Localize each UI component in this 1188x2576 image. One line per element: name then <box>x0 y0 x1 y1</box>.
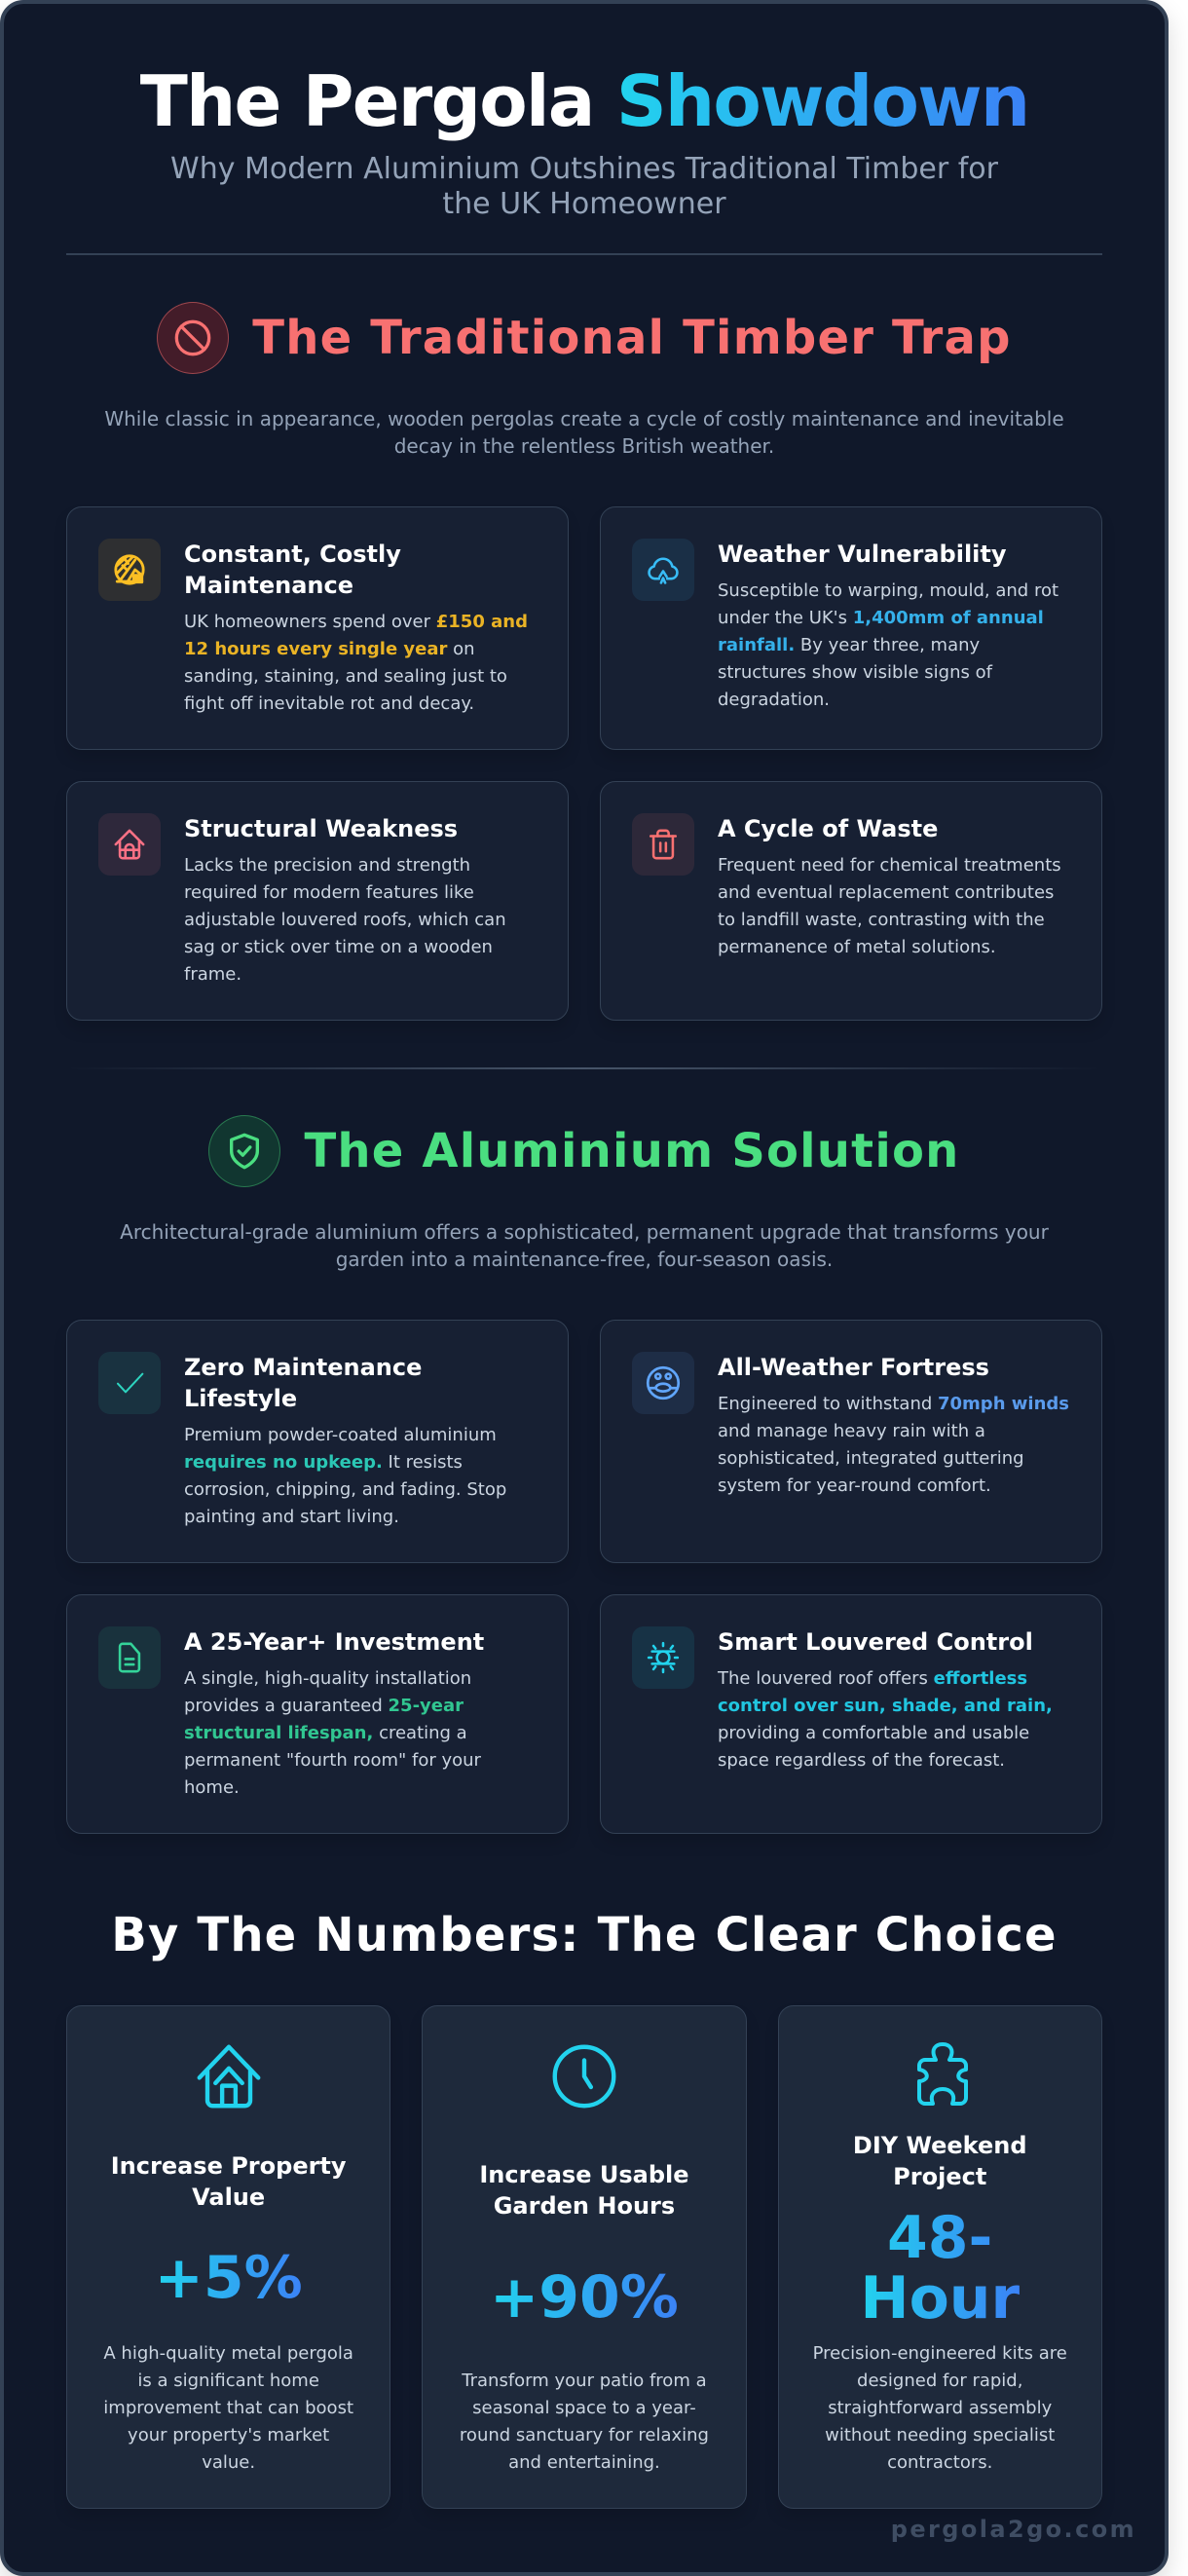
icon: weather face <box>632 1352 694 1414</box>
card: costly maintenance <box>66 506 569 750</box>
card text: Zero Maintenance Lifestyle <box>184 1354 422 1412</box>
stat number: Hour <box>860 2264 1020 2333</box>
card text: Engineered to withstand 70mph winds and manage heavy rain with a sophisticated, integrated guttering system for year-round comfort. <box>718 1394 1069 1496</box>
stat number: 48- <box>887 2204 992 2272</box>
stat text: Precision-engineered kits are designed for rapid, straightforward assembly without needing specialist contractors. <box>813 2343 1067 2473</box>
icon: ban <box>157 302 229 374</box>
card text: A single, high-quality installation provides a guaranteed 25-year structural lifespan, creating a permanent "fourth room" for your home. <box>184 1668 481 1798</box>
icon: document <box>98 1626 161 1689</box>
icon: house <box>197 2045 261 2108</box>
stat card: property value <box>66 2005 390 2509</box>
watermark: pergola2go.com <box>891 2516 1136 2543</box>
card text: Susceptible to warping, mould, and rot under the UK's 1,400mm of annual rainfall. By year three, many structures show visible signs of degradation. <box>718 580 1058 710</box>
card text: Smart Louvered Control <box>718 1628 1033 1656</box>
stat title: Increase Property Value <box>111 2152 347 2211</box>
card: smart louvered control <box>600 1594 1102 1834</box>
icon: clock <box>553 2045 615 2108</box>
card text: All-Weather Fortress <box>718 1354 989 1381</box>
card: structural weakness <box>66 781 569 1021</box>
card text: The louvered roof offers effortless control over sun, shade, and rain, providing a comfortable and usable space regardless of the forecast. <box>718 1668 1053 1771</box>
intro: timber: While classic in appearance, wooden pergolas create a cycle of costly maintenance and inevitable decay in the relentless British weather. <box>104 407 1064 458</box>
icon: house <box>98 813 161 876</box>
icon: maintenance <box>98 539 161 601</box>
card: zero maintenance <box>66 1320 569 1563</box>
card text: Lacks the precision and strength required for modern features like adjustable louvered roofs, which can sag or stick over time on a wooden frame. <box>184 855 506 985</box>
stat title: Increase Usable Garden Hours <box>479 2161 689 2220</box>
card text: Constant, Costly Maintenance <box>184 541 401 599</box>
icon: check <box>98 1352 161 1414</box>
card text: Premium powder-coated aluminium requires no upkeep. It resists corrosion, chipping, and fading. Stop painting and start living. <box>184 1425 506 1527</box>
stat text: A high-quality metal pergola is a significant home improvement that can boost your property's market value. <box>103 2343 353 2473</box>
icon: trash <box>632 813 694 876</box>
card: 25-year investment <box>66 1594 569 1834</box>
card: all-weather fortress <box>600 1320 1102 1563</box>
card text: A Cycle of Waste <box>718 815 938 842</box>
stat text: Transform your patio from a seasonal space to a year-round sanctuary for relaxing and entertaining. <box>460 2371 709 2473</box>
stat number: +5% <box>155 2244 303 2312</box>
heading text: The Aluminium Solution <box>304 1124 960 1178</box>
card text: Structural Weakness <box>184 815 458 842</box>
card text: Frequent need for chemical treatments and eventual replacement contributes to landfill waste, contrasting with the permanence of metal solutions. <box>718 855 1061 957</box>
heading text: The Traditional Timber Trap <box>252 311 1012 365</box>
title: The Pergola Showdown <box>140 60 1028 142</box>
icon: shield check <box>208 1115 280 1187</box>
heading: by the numbers: By The Numbers: The Clear Choice <box>111 1908 1058 1962</box>
icon: sun louvre <box>632 1626 694 1689</box>
subtitle: Why Modern Aluminium Outshines Traditional Timber for the UK Homeowner <box>170 152 998 221</box>
heading: aluminium solution <box>208 1115 960 1187</box>
stat number <box>860 2204 1020 2333</box>
card text: A 25-Year+ Investment <box>184 1628 484 1656</box>
intro: aluminium: Architectural-grade aluminium offers a sophisticated, permanent upgrade that transforms your garden into a maintenance-free, four-season oasis. <box>120 1220 1049 1271</box>
stat title: DIY Weekend Project <box>853 2132 1027 2190</box>
icon: cloud <box>632 539 694 601</box>
card: weather vulnerability <box>600 506 1102 750</box>
stat number: +90% <box>490 2263 679 2332</box>
stat card: diy project <box>778 2005 1102 2509</box>
icon: puzzle <box>917 2042 968 2106</box>
card text: UK homeowners spend over £150 and 12 hours every single year on sanding, staining, and sealing just to fight off inevitable rot and decay. <box>184 612 528 714</box>
card: cycle of waste <box>600 781 1102 1021</box>
stat card: garden hours <box>422 2005 747 2509</box>
card text: Weather Vulnerability <box>718 541 1007 568</box>
card text <box>184 1354 506 1527</box>
heading: timber trap <box>157 302 1012 374</box>
card text <box>184 541 528 714</box>
